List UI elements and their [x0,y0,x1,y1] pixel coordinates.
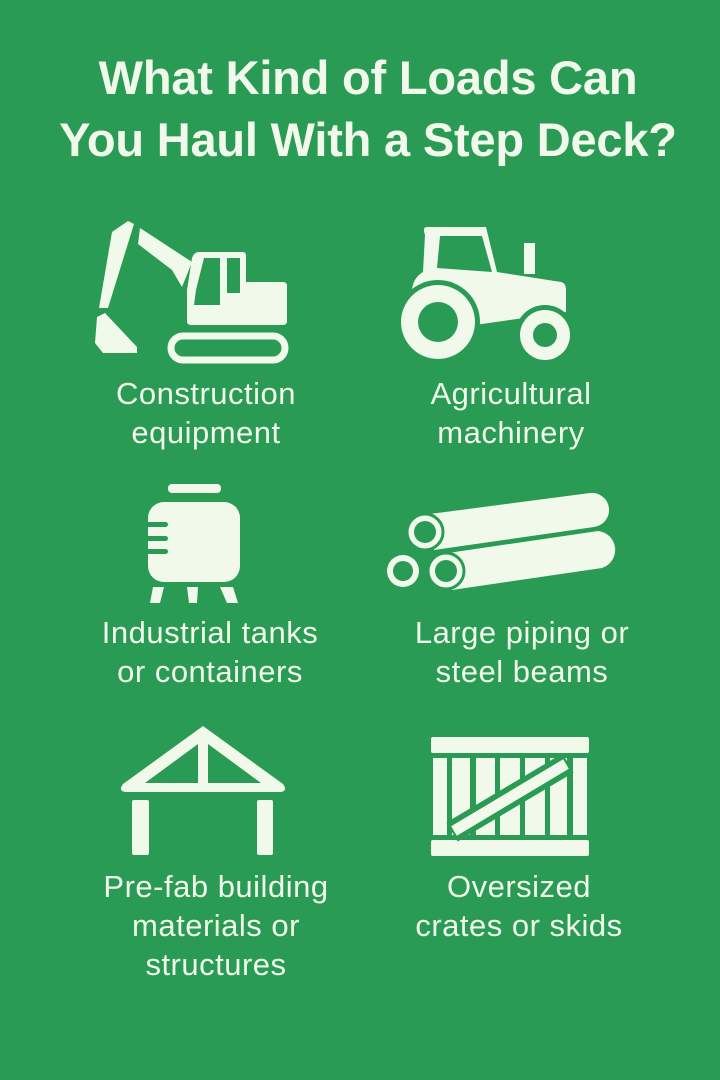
label: crates [415,869,623,943]
title: What Kind of Loads Can [99,51,637,104]
label: construction: equipment [131,415,281,450]
icon: truss structure [121,726,285,855]
label: piping [415,615,629,689]
label: tanks: Industrial tanks [102,615,318,650]
title: You Haul With a Step Deck? [59,113,677,166]
icon: tractor [396,227,575,365]
label: crates: Oversized [447,869,591,904]
label: prefab [103,869,329,982]
icon: pipes [387,493,615,590]
label: prefab: materials or [132,908,300,943]
label: prefab: Pre-fab building [103,869,329,904]
icon: excavator [95,221,287,360]
title [59,51,677,166]
icon: industrial tank [146,484,240,603]
label: tanks: or containers [117,654,303,689]
label: agricultural [430,376,592,450]
label: agricultural: Agricultural [430,376,592,411]
label: piping: Large piping or [415,615,629,650]
label: construction [116,376,296,450]
label: construction: Construction [116,376,296,411]
label: tanks [102,615,318,689]
label: piping: steel beams [436,654,608,689]
label: prefab: structures [145,947,287,982]
label: agricultural: machinery [437,415,585,450]
label: crates: crates or skids [415,908,623,943]
icon: crate [431,737,589,856]
